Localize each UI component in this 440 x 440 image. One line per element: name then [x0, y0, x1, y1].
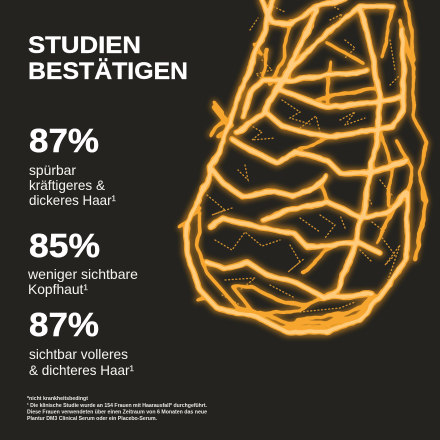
stat 2: weniger sichtbare — [27, 266, 138, 282]
glow halo — [180, 0, 427, 332]
stat 2 — [27, 227, 138, 297]
stat 3 — [29, 306, 134, 378]
footnote: *nicht krankheitsbedingt — [27, 396, 88, 402]
stat 3: sichtbar volleres — [29, 346, 128, 362]
illustration: glowing hair root — [180, 0, 427, 332]
fine root texture — [207, 2, 400, 312]
stat 1: dickeres Haar¹ — [29, 192, 116, 208]
footnote: Diese Frauen verwendeten über einen Zeitraum von 6 Monaten das neue — [27, 410, 207, 416]
footnote: ¹ Die klinische Studie wurde an 154 Frauen mit Haarausfall* durchgeführt. — [27, 403, 207, 409]
bright strand core — [187, 0, 408, 332]
stat 1: spürbar — [29, 162, 76, 178]
title — [28, 32, 188, 85]
stat 1 — [29, 122, 116, 208]
stat 1: 87% — [29, 122, 99, 159]
footnote — [27, 396, 207, 422]
stat 2: Kopfhaut¹ — [28, 281, 88, 297]
footnote: Plantur DM3 Clinical Serum oder ein Placebo-Serum. — [27, 416, 157, 422]
stat 2: 85% — [29, 227, 100, 264]
main strands — [180, 0, 427, 332]
title: BESTÄTIGEN — [28, 58, 188, 85]
stat 3: & dichteres Haar¹ — [29, 362, 134, 378]
title: STUDIEN — [28, 32, 141, 59]
stat 1: kräftigeres & — [29, 177, 106, 193]
stat 3: 87% — [29, 306, 99, 343]
